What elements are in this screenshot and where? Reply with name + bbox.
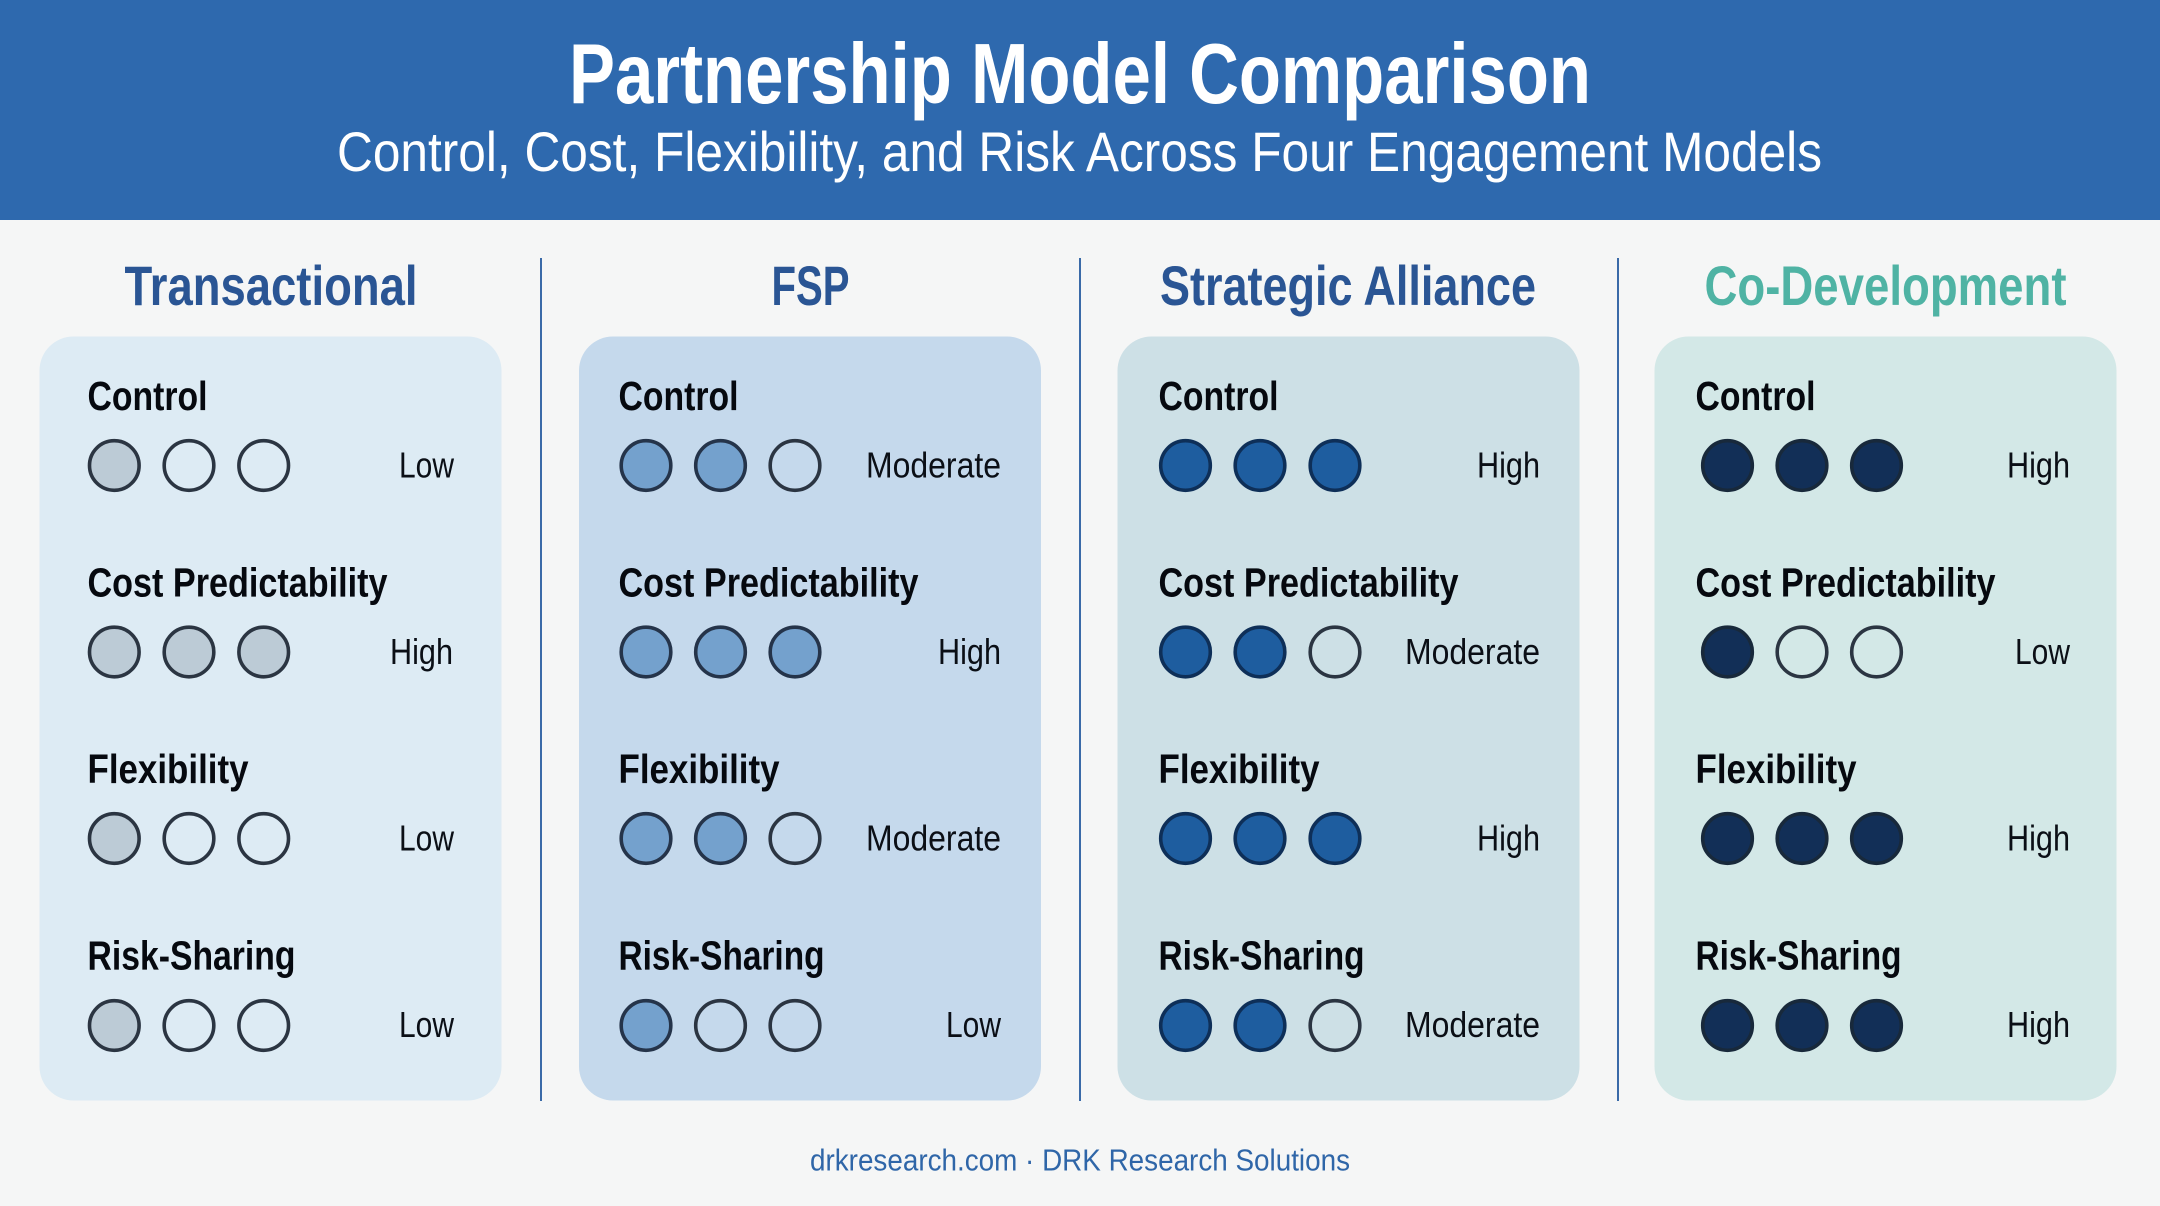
row: Cost Predictability — [618, 560, 1001, 677]
row: Risk-Sharing — [618, 932, 1002, 1050]
column: Strategic Alliance — [1118, 254, 1580, 1100]
row: Cost Predictability: High — [938, 631, 1001, 672]
panel: Strategic Alliance — [1118, 336, 1580, 1100]
row: Control — [1696, 373, 2070, 490]
row: Risk-Sharing: Moderate — [1405, 1004, 1540, 1045]
row: Flexibility — [88, 746, 455, 863]
row: Control: Control — [618, 373, 738, 419]
subtitle: Control, Cost, Flexibility, and Risk Across Four Engagement Models — [337, 120, 1822, 183]
row: Cost Predictability — [1696, 560, 2071, 677]
row: Risk-Sharing: Risk-Sharing — [618, 932, 824, 978]
row: Flexibility: Flexibility — [88, 746, 249, 792]
row: Control: Low — [399, 444, 455, 486]
row: Control: Control — [1696, 373, 1816, 419]
row: Flexibility: High — [2007, 818, 2070, 858]
row: Control — [1158, 373, 1540, 490]
row: Flexibility: Flexibility — [1158, 746, 1320, 792]
row: Control: High — [2007, 444, 2070, 486]
heading: Co-Development: Co-Development — [1704, 254, 2066, 317]
column: FSP — [579, 254, 1041, 1100]
row: Flexibility — [1696, 746, 2070, 863]
row: Cost Predictability: Cost Predictability — [618, 560, 919, 606]
row: Risk-Sharing: Risk-Sharing — [88, 932, 296, 978]
row: Cost Predictability: Low — [2015, 631, 2071, 672]
row: Cost Predictability: Cost Predictability — [88, 560, 388, 606]
heading: FSP: FSP — [772, 254, 850, 317]
row: Risk-Sharing — [1158, 932, 1540, 1050]
row: Control: Control — [88, 373, 208, 419]
row: Risk-Sharing: High — [2007, 1004, 2070, 1045]
row: Cost Predictability: Cost Predictability — [1696, 560, 1996, 606]
row: Risk-Sharing: Low — [399, 1004, 455, 1045]
row: Cost Predictability — [88, 560, 453, 677]
row: Risk-Sharing: Low — [946, 1004, 1002, 1045]
row: Cost Predictability: Moderate — [1405, 631, 1540, 672]
footer credit: drkresearch.com · DRK Research Solutions — [810, 1142, 1350, 1178]
panel: FSP — [579, 336, 1041, 1100]
column: Co-Development — [1654, 254, 2116, 1100]
row: Risk-Sharing: Risk-Sharing — [1696, 932, 1902, 978]
title: Partnership Model Comparison — [569, 27, 1591, 122]
panel: Co-Development — [1654, 336, 2116, 1100]
column: Transactional — [40, 254, 502, 1100]
row: Cost Predictability: High — [390, 631, 453, 672]
row: Control: High — [1477, 444, 1540, 486]
heading: Transactional: Transactional — [124, 254, 418, 317]
row: Flexibility: High — [1477, 818, 1540, 858]
row: Flexibility: Moderate — [866, 818, 1001, 858]
heading: Strategic Alliance: Strategic Alliance — [1160, 254, 1536, 317]
row: Flexibility — [1158, 746, 1540, 863]
row: Control: Control — [1158, 373, 1278, 419]
row: Risk-Sharing: Risk-Sharing — [1158, 932, 1364, 978]
row: Cost Predictability — [1158, 560, 1540, 677]
header banner — [0, 0, 2160, 220]
row: Flexibility: Flexibility — [1696, 746, 1857, 792]
row: Control — [88, 373, 455, 490]
row: Flexibility — [618, 746, 1001, 863]
row: Control: Moderate — [866, 444, 1001, 486]
row: Cost Predictability: Cost Predictability — [1158, 560, 1459, 606]
row: Risk-Sharing — [88, 932, 455, 1050]
row: Control — [618, 373, 1001, 490]
panel: Transactional — [40, 336, 502, 1100]
row: Risk-Sharing — [1696, 932, 2070, 1050]
column dividers — [540, 258, 1619, 1101]
row: Flexibility: Low — [399, 818, 455, 858]
row: Flexibility: Flexibility — [618, 746, 780, 792]
